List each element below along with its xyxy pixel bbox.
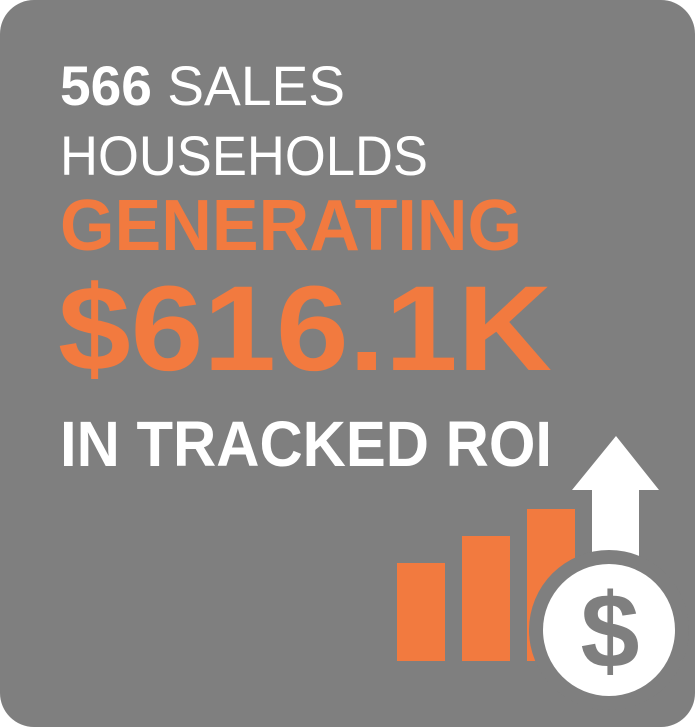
heading line 2: HOUSEHOLDS [60, 124, 428, 187]
icon: up arrow [572, 436, 659, 560]
heading: generating: GENERATING [60, 186, 522, 266]
big number: $616.1K [58, 260, 552, 396]
heading line 1: 566 SALES [60, 54, 345, 117]
subheading: IN TRACKED ROI [60, 408, 552, 480]
icon: bar chart [397, 509, 575, 661]
icon: dollar coin [529, 550, 689, 710]
icon: dollar coin: $ [581, 572, 639, 690]
